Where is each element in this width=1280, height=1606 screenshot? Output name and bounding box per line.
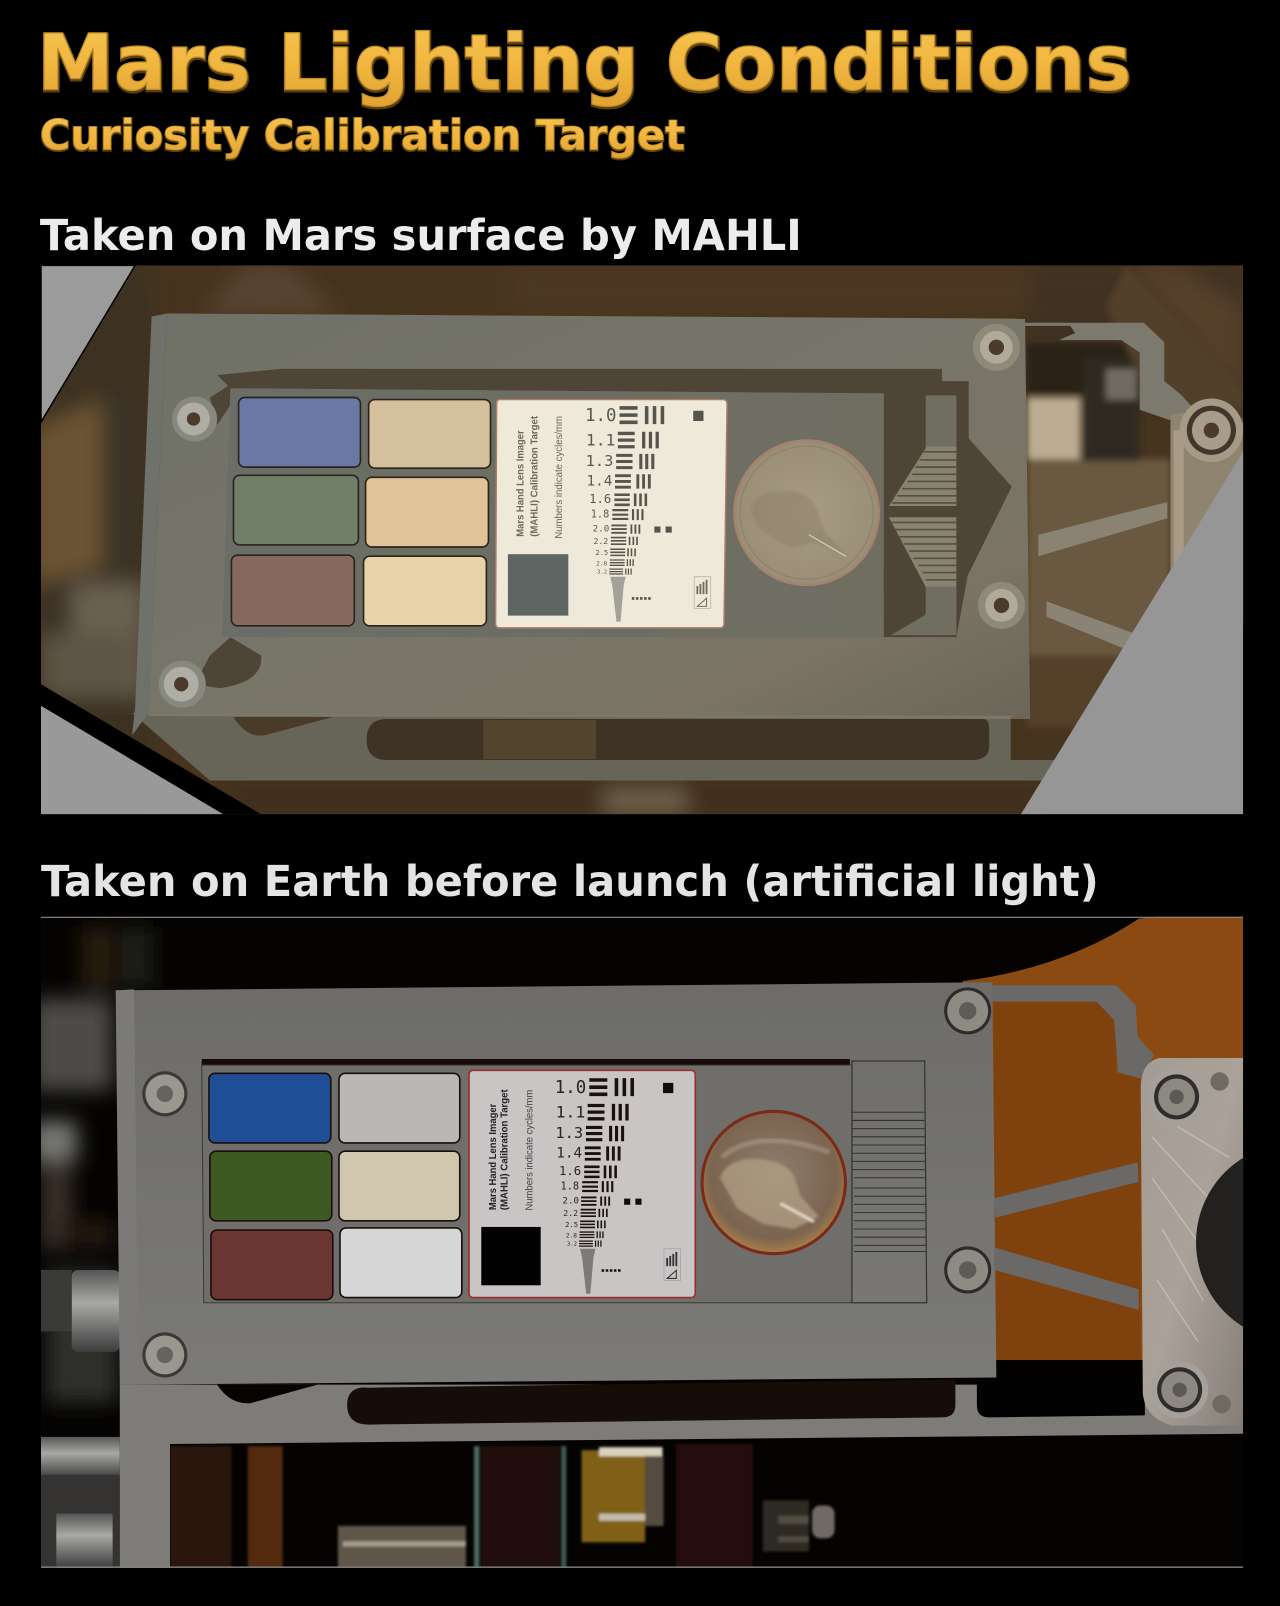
screw — [978, 582, 1025, 629]
subtitle: Curiosity Calibration Target — [40, 111, 685, 160]
resolution numbers: 1.4 — [556, 1146, 582, 1162]
card caption: (MAHLI) Calibration Target — [530, 415, 541, 537]
resolution numbers: 2.2 — [563, 1208, 578, 1218]
right bracket — [1025, 323, 1243, 650]
title: Mars Lighting Conditions — [37, 20, 1132, 110]
left cylinders — [72, 1270, 120, 1352]
gray reference square — [508, 554, 568, 616]
recessed panel — [202, 1059, 852, 1303]
black wedge — [41, 684, 261, 814]
resolution numbers: 1.0 — [555, 1078, 586, 1098]
stepped relief — [852, 1061, 927, 1303]
resolution numbers: 2.0 — [562, 1196, 579, 1207]
black reference square — [481, 1227, 541, 1285]
swatches — [209, 1073, 462, 1300]
resolution numbers: 1.6 — [559, 1164, 581, 1178]
screw — [172, 396, 217, 442]
resolution numbers: 1.3 — [555, 1124, 583, 1142]
photo background — [31, 265, 1249, 814]
panel: Mars surface photo — [31, 265, 1249, 814]
screw — [142, 1071, 187, 1116]
plate edge — [132, 314, 167, 735]
plate — [148, 314, 1030, 716]
screws — [159, 324, 1243, 708]
screws — [142, 987, 991, 1377]
resolution numbers: 2.2 — [593, 536, 608, 546]
swatch: blue — [239, 397, 360, 467]
swatch: green — [233, 475, 358, 545]
swatch: tan — [369, 400, 490, 468]
swatch: white — [340, 1228, 462, 1298]
stepped relief — [889, 395, 956, 635]
screw — [944, 1246, 991, 1293]
logo — [694, 577, 711, 608]
screw — [973, 324, 1020, 371]
panel: Earth pre-launch photo — [31, 917, 1280, 1568]
resolution numbers: 2.8 — [596, 560, 608, 567]
screw — [142, 1332, 187, 1377]
gray corner: bottom left — [41, 706, 223, 814]
cast shadows — [195, 369, 1012, 688]
swatch: maroon — [211, 1230, 333, 1300]
screw — [1148, 1068, 1205, 1126]
swatch: green — [210, 1151, 332, 1221]
resolution numbers: 1.0 — [585, 406, 616, 426]
resolution bars — [609, 406, 662, 575]
resolution numbers: 2.5 — [595, 548, 608, 557]
swatches — [231, 397, 490, 626]
resolution numbers: 1.1 — [556, 1103, 585, 1122]
steel mount — [1141, 1058, 1280, 1426]
orange backdrop — [963, 917, 1243, 1360]
swatch: light gray — [339, 1073, 460, 1143]
resolution card — [469, 1070, 695, 1298]
coin — [734, 441, 879, 585]
resolution numbers — [555, 1078, 586, 1248]
screw — [159, 661, 206, 708]
screw — [944, 987, 991, 1034]
card caption: Numbers indicate cycles/mm — [554, 416, 565, 539]
resolution numbers: 2.0 — [593, 524, 609, 535]
lower frame — [120, 1378, 1243, 1568]
screw — [1180, 399, 1243, 462]
lower frame — [132, 713, 1065, 780]
card caption — [488, 1089, 535, 1211]
resolution numbers: 1.1 — [586, 431, 615, 450]
subtitle: Curiosity Calibration Target — [40, 112, 685, 161]
screw — [1151, 1361, 1208, 1418]
target marks — [632, 411, 703, 600]
card caption — [515, 415, 565, 539]
resolution numbers: 1.8 — [591, 508, 609, 520]
gray corner: top left — [41, 265, 135, 422]
resolution card — [496, 400, 727, 628]
fine bars taper — [610, 577, 626, 622]
swatch: blue — [209, 1073, 331, 1143]
resolution numbers — [587, 408, 616, 574]
card caption: (MAHLI) Calibration Target — [499, 1089, 510, 1210]
coin — [702, 1111, 845, 1254]
resolution numbers: 2.5 — [565, 1220, 578, 1229]
resolution numbers: 3.2 — [567, 1242, 577, 1248]
lower interior — [170, 1444, 835, 1568]
resolution numbers: 1.6 — [589, 492, 611, 506]
logo — [664, 1249, 680, 1280]
recessed panel — [222, 388, 884, 637]
resolution numbers: 3.2 — [597, 570, 607, 576]
card caption: Mars Hand Lens Imager — [515, 430, 526, 537]
resolution numbers: 2.8 — [566, 1232, 577, 1239]
bracket and struts — [992, 985, 1154, 1310]
resolution numbers: 1.4 — [586, 474, 612, 490]
swatch: cream — [339, 1151, 460, 1221]
plate — [116, 982, 996, 1385]
title: Mars Lighting Conditions — [37, 18, 1132, 108]
swatch: cream — [364, 556, 486, 626]
heading: Mars photo: Taken on Mars surface by MAHLI — [40, 212, 802, 261]
swatch: peach — [366, 477, 488, 547]
resolution numbers: 1.8 — [561, 1180, 579, 1192]
resolution numbers: 1.3 — [586, 452, 613, 470]
photo background — [31, 917, 1243, 1568]
resolution bars — [579, 1078, 673, 1294]
card caption: Numbers indicate cycles/mm — [524, 1090, 535, 1211]
swatch: brown — [231, 555, 354, 626]
heading: Earth photo: Taken on Earth before launch (artificial light) — [41, 858, 1099, 907]
gray corner: bottom right — [1021, 452, 1243, 814]
card caption: Mars Hand Lens Imager — [488, 1103, 499, 1210]
